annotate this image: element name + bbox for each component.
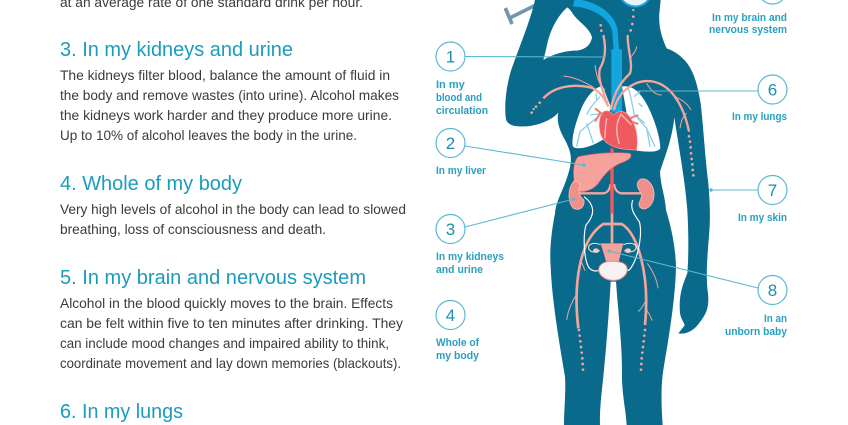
callout 3: kidneys and urine: and urine	[436, 264, 483, 276]
illustration: female body with organs	[505, 0, 710, 425]
callout 7: skin	[738, 176, 787, 224]
section 4: whole of my body	[60, 173, 406, 237]
section 5: brain and nervous system: can include mood changes and impaired ability to think,	[60, 335, 389, 351]
callout 8: unborn baby: 8	[768, 281, 777, 300]
icon: bladder	[599, 261, 627, 280]
callout 1: blood and circulation: 1	[446, 48, 455, 66]
icon: wine glass	[505, 0, 575, 24]
callout 8: unborn baby: In an	[764, 313, 787, 325]
callout 8: unborn baby	[725, 276, 788, 338]
callout 4: whole of my body: my body	[436, 350, 480, 362]
icon: uterus and ovaries	[589, 243, 636, 263]
icon: ureters and bladder outline	[584, 197, 640, 271]
dotted nerve lines	[530, 9, 695, 371]
section 5: brain and nervous system: Alcohol in the blood quickly moves to the brain. Effects	[60, 295, 393, 311]
callout 5: brain and nervous system	[709, 0, 787, 36]
section 5: brain and nervous system: can be felt within five to ten minutes after drinking. They	[60, 315, 403, 331]
callout 4: whole of my body: Whole of	[436, 337, 479, 349]
icon: bright blue airway and brain link	[573, 0, 622, 113]
body silhouette	[505, 0, 710, 425]
callout 7: skin: 7	[768, 181, 777, 200]
section 3: kidneys and urine: Up to 10% of alcohol leaves the body in the urine.	[60, 127, 357, 143]
callout 5: brain and nervous system: nervous system	[709, 24, 787, 36]
callout 3: kidneys and urine: In my kidneys	[436, 251, 504, 263]
section 5: brain and nervous system: coordinate movement and lay down memories (blackouts).	[60, 355, 401, 371]
icon: kidneys	[569, 179, 654, 209]
icon: brain	[621, 0, 649, 7]
callout 2: liver	[436, 128, 487, 177]
section 3: kidneys and urine: the body and remove wastes (into urine). Alcohol makes	[60, 87, 399, 103]
section 4: whole of my body: Very high levels of alcohol in the body can lead to slowed	[60, 201, 406, 217]
callout 6: lungs	[732, 75, 787, 123]
section 3: kidneys and urine: the kidneys work harder and they produce more urine.	[60, 107, 392, 123]
callout 1: blood and circulation: circulation	[436, 105, 488, 117]
callout 4: whole of my body	[436, 300, 480, 362]
callout 5: brain and nervous system: In my brain and	[712, 12, 787, 24]
callout 3: kidneys and urine	[436, 214, 504, 276]
callout 8: unborn baby: unborn baby	[725, 326, 788, 338]
icon: central aorta	[607, 148, 617, 213]
leader lines	[465, 56, 758, 288]
section 4: whole of my body: breathing, loss of consciousness and death.	[60, 221, 326, 237]
callout 2: liver: In my liver	[436, 165, 487, 177]
section 5: brain and nervous system: 5. In my brain and nervous system	[60, 267, 366, 289]
callout 6: lungs: In my lungs	[732, 111, 787, 123]
section 3: kidneys and urine	[60, 39, 399, 143]
icon: heart	[595, 108, 638, 150]
icon: lungs	[572, 86, 660, 152]
icon: liver	[574, 153, 631, 192]
callout 7: skin: In my skin	[738, 212, 787, 224]
callout 3: kidneys and urine: 3	[446, 220, 455, 239]
callout 1: blood and circulation: blood and	[436, 92, 482, 104]
icon: arteries and veins	[543, 35, 691, 328]
callout 6: lungs: 6	[768, 80, 777, 100]
section 3: kidneys and urine: The kidneys filter blood, balance the amount of fluid in	[60, 67, 390, 83]
heading: section 6 lungs: 6. In my lungs	[60, 401, 183, 423]
callout 4: whole of my body: 4	[446, 306, 455, 325]
callout 1: blood and circulation: In my	[436, 79, 466, 91]
section 4: whole of my body: 4. Whole of my body	[60, 173, 242, 195]
section 3: kidneys and urine: 3. In my kidneys and urine	[60, 39, 293, 61]
callout 2: liver: 2	[446, 134, 455, 153]
callout 1: blood and circulation	[436, 42, 488, 117]
panel: explanatory text	[60, 0, 406, 423]
white gap between raised arm and neck	[543, 7, 592, 60]
section 5: brain and nervous system	[60, 267, 403, 371]
